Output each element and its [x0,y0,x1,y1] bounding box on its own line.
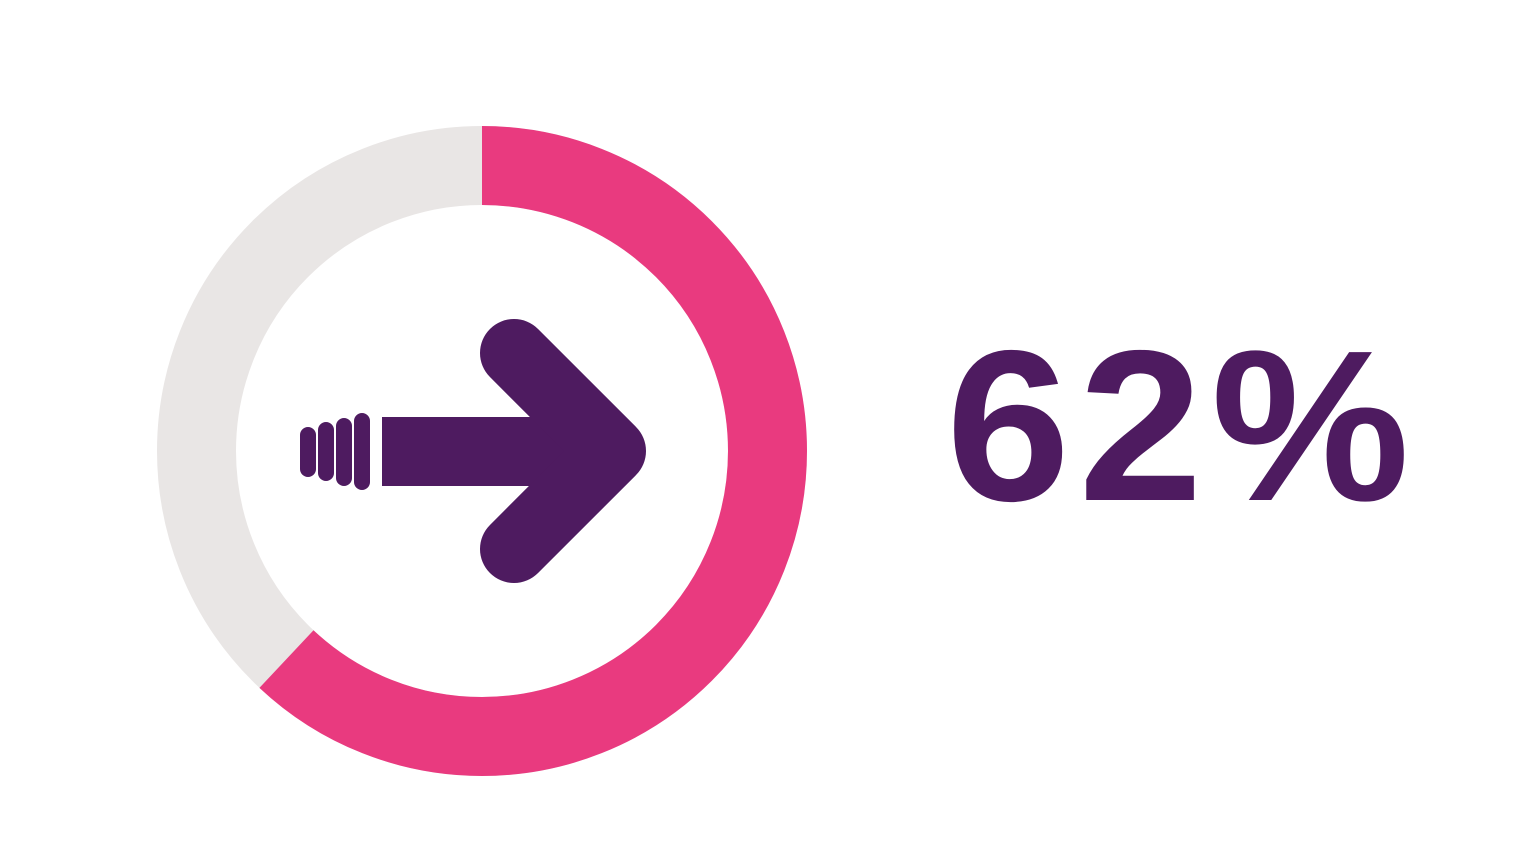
donut track [196,166,768,736]
arrow head [514,353,612,549]
donut value arc 62% [196,166,768,736]
percentage value: 62% [946,305,1418,546]
motion bars [300,413,370,490]
arrow shaft [382,417,614,486]
icon: arrow with motion bars [300,353,614,549]
donut chart [196,166,768,736]
